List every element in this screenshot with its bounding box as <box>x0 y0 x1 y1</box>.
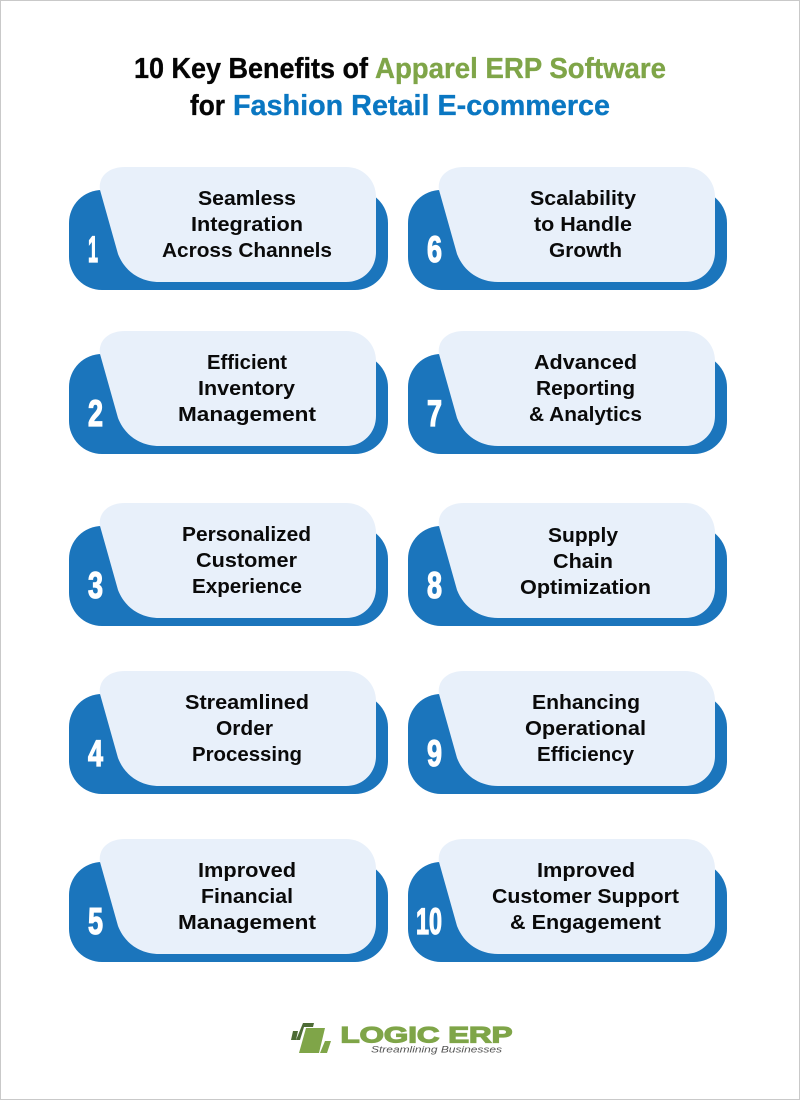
card 7: Advanced Reporting & Analytics: Advanced <box>534 351 637 374</box>
card 4: Streamlined Order Processing: Streamlined <box>185 691 309 714</box>
card 5: Improved Financial Management: Improved <box>198 859 296 882</box>
card 4: Streamlined Order Processing: 4 <box>88 733 103 774</box>
card 9: Enhancing Operational Efficiency: Operational <box>525 717 646 740</box>
card 8: Supply Chain Optimization <box>408 503 727 626</box>
card 8: Supply Chain Optimization: Supply <box>548 524 619 547</box>
card 1: Seamless Integration Across Channels: Across Channels <box>162 239 332 262</box>
logo: Logic ERP: Streamlining Businesses <box>371 1044 502 1056</box>
card 1: Seamless Integration Across Channels: 1 <box>88 229 98 270</box>
card 1: Seamless Integration Across Channels: Integration <box>191 213 303 236</box>
card 2: Efficient Inventory Management: Management <box>178 403 316 426</box>
card 8: Supply Chain Optimization: Optimization <box>520 576 651 599</box>
title: for <box>190 90 225 122</box>
title <box>134 53 666 122</box>
card 9: Enhancing Operational Efficiency: Efficiency <box>537 743 635 766</box>
card 8: Supply Chain Optimization: 8 <box>427 565 442 606</box>
title: Fashion Retail E-commerce <box>233 90 610 122</box>
card 7: Advanced Reporting & Analytics <box>408 331 727 454</box>
title: 10 Key Benefits of <box>134 53 368 85</box>
logo: Logic ERP: LOGIC ERP <box>340 1022 512 1048</box>
card 2: Efficient Inventory Management: 2 <box>88 393 103 434</box>
card 5: Improved Financial Management <box>69 839 388 962</box>
card 6: Scalability to Handle Growth: 6 <box>427 229 442 270</box>
card 10: Improved Customer Support & Engagement: 10 <box>416 901 442 942</box>
card 2: Efficient Inventory Management <box>69 331 388 454</box>
card 5: Improved Financial Management: Financial <box>201 885 293 908</box>
card 3: Personalized Customer Experience: Personalized <box>182 523 311 546</box>
card 9: Enhancing Operational Efficiency: 9 <box>427 733 442 774</box>
card 7: Advanced Reporting & Analytics: & Analytics <box>529 403 642 426</box>
title: Apparel ERP Software <box>375 53 666 85</box>
card 10: Improved Customer Support & Engagement: & Engagement <box>510 911 661 934</box>
card 1: Seamless Integration Across Channels: Seamless <box>198 187 296 210</box>
card 3: Personalized Customer Experience: Experience <box>192 575 302 598</box>
card 2: Efficient Inventory Management: Inventory <box>198 377 296 400</box>
card 7: Advanced Reporting & Analytics: 7 <box>427 393 442 434</box>
card 4: Streamlined Order Processing: Order <box>216 717 273 740</box>
card 5: Improved Financial Management: 5 <box>88 901 103 942</box>
card 7: Advanced Reporting & Analytics: Reporting <box>536 377 635 400</box>
card 10: Improved Customer Support & Engagement <box>408 839 727 962</box>
card 6: Scalability to Handle Growth: to Handle <box>534 213 632 236</box>
card 9: Enhancing Operational Efficiency <box>408 671 727 794</box>
card 4: Streamlined Order Processing <box>69 671 388 794</box>
card 4: Streamlined Order Processing: Processing <box>192 743 302 766</box>
card 3: Personalized Customer Experience: Customer <box>196 549 297 572</box>
card 10: Improved Customer Support & Engagement: Customer Support <box>492 885 679 908</box>
card 8: Supply Chain Optimization: Chain <box>553 550 613 573</box>
card 6: Scalability to Handle Growth <box>408 167 727 290</box>
card 2: Efficient Inventory Management: Efficient <box>207 351 287 374</box>
card 1: Seamless Integration Across Channels <box>69 167 388 290</box>
card 10: Improved Customer Support & Engagement: Improved <box>537 859 635 882</box>
card 5: Improved Financial Management: Management <box>178 911 316 934</box>
card 9: Enhancing Operational Efficiency: Enhancing <box>532 691 640 714</box>
card 6: Scalability to Handle Growth: Growth <box>549 239 622 262</box>
card 6: Scalability to Handle Growth: Scalability <box>530 187 637 210</box>
logo: Logic ERP <box>291 1022 512 1056</box>
card 3: Personalized Customer Experience: 3 <box>88 565 103 606</box>
card 3: Personalized Customer Experience <box>69 503 388 626</box>
